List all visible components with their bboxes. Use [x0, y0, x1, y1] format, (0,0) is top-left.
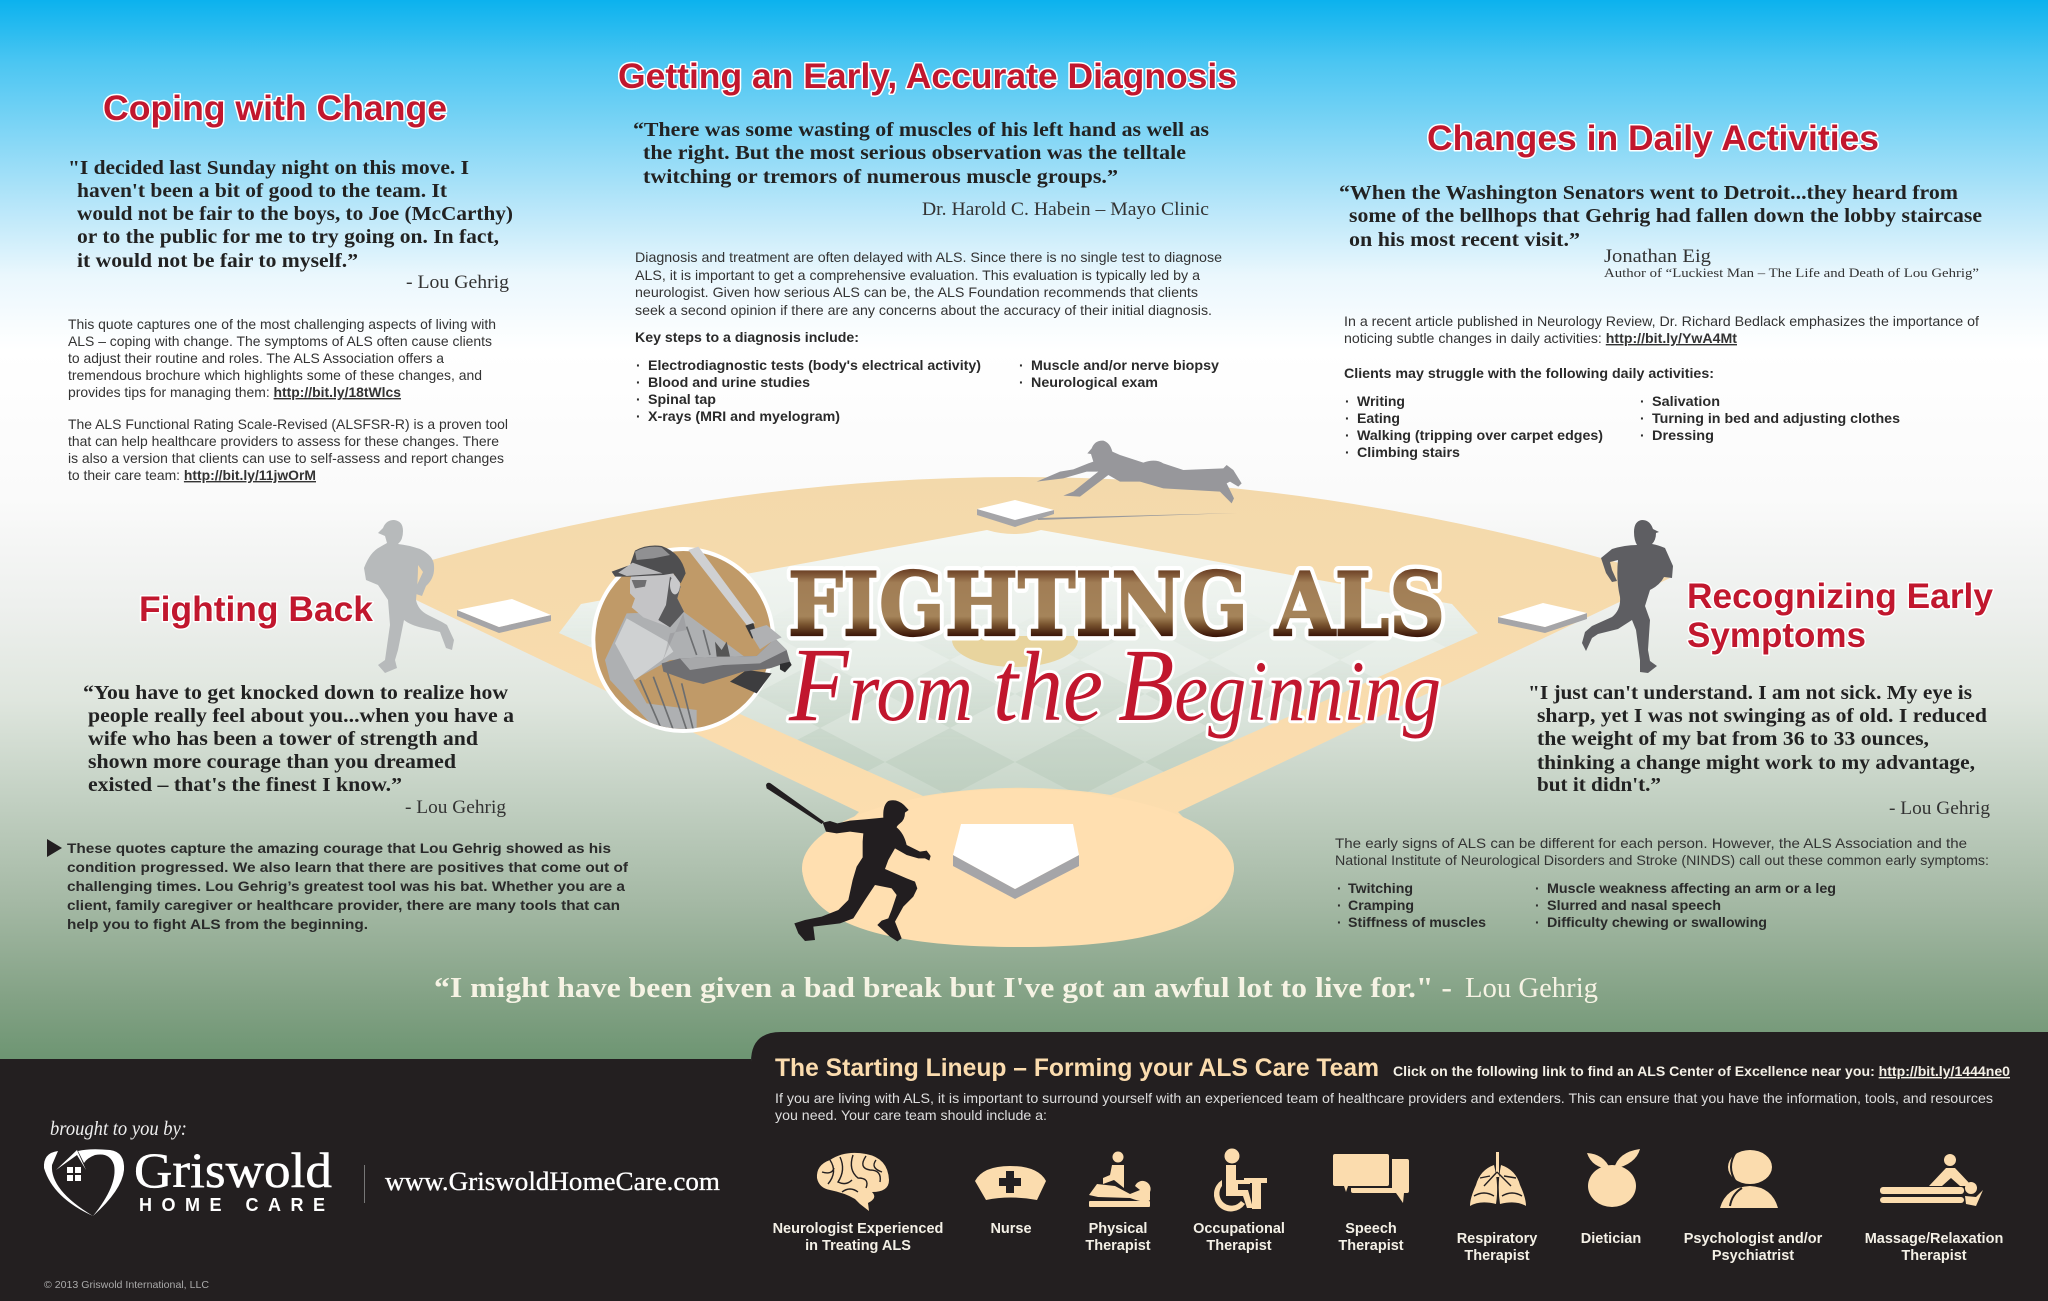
daily activities list: Dressing	[1652, 427, 1714, 443]
tagline: HOME CARE	[139, 1195, 325, 1215]
key steps list: ·	[636, 391, 641, 407]
symptoms list: ·	[1535, 880, 1540, 896]
quote: it would not be fair to myself.”	[77, 250, 358, 272]
team: neurologist	[773, 1153, 943, 1254]
quote	[1528, 682, 1990, 819]
icon: physical therapist	[1089, 1152, 1151, 1207]
slide shadow line	[1038, 513, 1237, 520]
heading: Getting an Early, Accurate Diagnosis	[618, 57, 1237, 96]
baseball field	[370, 477, 1670, 947]
icon: massage	[1880, 1154, 1983, 1206]
Griswold Home Care logo	[44, 1142, 332, 1216]
icon: wheelchair at desk	[1214, 1148, 1267, 1211]
batter silhouette	[766, 783, 931, 941]
symptoms list: Difficulty chewing or swallowing	[1547, 914, 1767, 930]
label: Therapist	[1901, 1248, 1967, 1264]
body text: The ALS Functional Rating Scale-Revised (ALSFSR-R) is a proven tool	[68, 416, 508, 432]
heading: Changes in Daily Activities	[1427, 119, 1879, 158]
closing quote: “I might have been given a bad break but I've got an awful lot to live for." -	[434, 972, 1452, 1004]
quote: on his most recent visit.”	[1349, 229, 1580, 251]
label: Therapist	[1464, 1248, 1530, 1264]
quote: would not be fair to the boys, to Joe (McCarthy)	[77, 203, 513, 225]
label	[1457, 1231, 1537, 1264]
quote: but it didn't.”	[1537, 774, 1661, 796]
icon: speech bubbles	[1333, 1154, 1409, 1203]
icon: brain	[817, 1153, 889, 1211]
body text: tremendous brochure which highlights some of these changes, and	[68, 367, 482, 383]
body text	[635, 249, 1222, 318]
symptoms list	[1337, 880, 1836, 930]
body text: Diagnosis and treatment are often delayed with ALS. Since there is no single test to diagnose	[635, 249, 1222, 265]
quote: “When the Washington Senators went to Detroit...they heard from	[1339, 182, 1958, 204]
body text: condition progressed. We also learn that there are positives that come out of	[67, 859, 628, 875]
body text: seek a second opinion if there are any concerns about the accuracy of their initial diagnosis.	[635, 302, 1212, 318]
daily activities list: Clients may struggle with the following daily activities:	[1344, 365, 1714, 381]
key steps list	[635, 329, 1219, 424]
panel: changes in daily activities	[1339, 119, 1982, 460]
daily activities list: Eating	[1357, 410, 1400, 426]
daily activities list: ·	[1345, 427, 1350, 443]
quote: Jonathan Eig	[1604, 246, 1712, 267]
quote: wife who has been a tower of strength and	[88, 728, 479, 750]
symptoms list: Cramping	[1348, 897, 1414, 913]
key steps list: Spinal tap	[648, 391, 716, 407]
daily activities list: ·	[1640, 393, 1645, 409]
symptoms list: ·	[1535, 897, 1540, 913]
symptoms list: Twitching	[1348, 880, 1413, 896]
label	[1865, 1231, 2003, 1264]
label: Dietician	[1581, 1231, 1641, 1247]
symptoms list: ·	[1337, 880, 1342, 896]
footer band	[0, 1032, 2048, 1301]
body text: provides tips for managing them: http://bit.ly/18tWlcs	[68, 384, 401, 400]
daily activities list: ·	[1345, 393, 1350, 409]
team: massage therapist	[1865, 1154, 2003, 1264]
closing quote: Lou Gehrig	[1465, 973, 1598, 1004]
label: Nurse	[990, 1221, 1032, 1237]
quote: shown more courage than you dreamed	[88, 751, 457, 773]
quote: people really feel about you...when you have a	[88, 705, 514, 727]
key steps list: ·	[636, 357, 641, 373]
key steps list: Electrodiagnostic tests (body's electrical activity)	[648, 357, 981, 373]
body text: to adjust their routine and roles. The ALS Association offers a	[68, 350, 444, 366]
second base	[977, 500, 1054, 527]
label: Speech	[1345, 1221, 1397, 1237]
quote	[68, 157, 513, 293]
left base	[457, 599, 551, 633]
label: Massage/Relaxation	[1865, 1231, 2003, 1247]
body text	[67, 840, 628, 932]
body text: is also a version that clients can use to self-assess and report changes	[68, 450, 504, 466]
daily activities list: Walking (tripping over carpet edges)	[1357, 427, 1603, 443]
daily activities list: Writing	[1357, 393, 1405, 409]
quote: - Lou Gehrig	[1889, 798, 1990, 819]
quote	[1339, 182, 1982, 280]
icon: lungs	[1470, 1152, 1526, 1206]
body text: help you to fight ALS from the beginning.	[67, 916, 368, 932]
key steps list: ·	[1019, 357, 1024, 373]
key steps list: ·	[636, 408, 641, 424]
panel: early accurate diagnosis	[618, 57, 1237, 424]
sliding runner silhouette	[1037, 441, 1242, 503]
label	[1085, 1221, 1151, 1254]
body text	[68, 316, 508, 483]
website url: www.GriswoldHomeCare.com	[385, 1167, 720, 1196]
quote: existed – that's the finest I know.”	[88, 774, 402, 796]
team: occupational therapist	[1193, 1148, 1285, 1254]
right runner silhouette	[1582, 520, 1673, 673]
copyright: © 2013 Griswold International, LLC	[44, 1279, 209, 1291]
quote: or to the public for me to try going on. In fact,	[77, 226, 499, 248]
home plate	[953, 824, 1079, 899]
label	[773, 1221, 943, 1254]
icon: nurse cap	[975, 1166, 1046, 1200]
icon: person with shadow	[1720, 1150, 1778, 1208]
team: psychologist	[1684, 1150, 1823, 1264]
label: Physical	[1089, 1221, 1147, 1237]
quote: - Lou Gehrig	[405, 797, 506, 818]
label: Respiratory	[1457, 1231, 1537, 1247]
quote: thinking a change might work to my advantage,	[1537, 752, 1975, 774]
key steps list: X-rays (MRI and myelogram)	[648, 408, 840, 424]
label	[1684, 1231, 1823, 1264]
daily activities list: ·	[1345, 444, 1350, 460]
label: Therapist	[1085, 1238, 1151, 1254]
intro text: you need. Your care team should include a:	[775, 1107, 1047, 1123]
icon: apple	[1587, 1149, 1640, 1207]
body text: neurologist. Given how serious ALS can be, the ALS Foundation recommends that clients	[635, 284, 1198, 300]
label: Neurologist Experienced	[773, 1221, 943, 1237]
quote: the weight of my bat from 36 to 33 ounces,	[1537, 728, 1929, 750]
label: Psychologist and/or	[1684, 1231, 1823, 1247]
daily activities list: ·	[1345, 410, 1350, 426]
link line: Click on the following link to find an ALS Center of Excellence near you: http://bit.ly/1444ne0	[1393, 1063, 2010, 1079]
subtitle: From the Beginning: Beginning	[1118, 628, 1441, 743]
team: physical therapist	[1085, 1152, 1151, 1254]
title: Fighting ALS: FIGHTING ALS	[788, 553, 1445, 656]
quote: haven't been a bit of good to the team. It	[77, 180, 447, 202]
label	[1338, 1221, 1404, 1254]
quote: - Lou Gehrig	[406, 272, 510, 293]
key steps list: Muscle and/or nerve biopsy	[1031, 357, 1219, 373]
portrait of Lou Gehrig	[591, 546, 792, 733]
label	[1193, 1221, 1285, 1254]
body text: that can help healthcare providers to assess for these changes. There	[68, 433, 499, 449]
daily activities list: ·	[1640, 427, 1645, 443]
quote: Author of “Luckiest Man – The Life and Death of Lou Gehrig”	[1604, 266, 1979, 280]
body text: challenging times. Lou Gehrig’s greatest tool was his bat. Whether you are a	[67, 878, 625, 894]
quote	[633, 119, 1209, 220]
icon: heart and house	[44, 1149, 124, 1216]
left runner silhouette	[364, 520, 454, 673]
title: Fighting ALS: FIGHTING ALS	[788, 553, 1445, 656]
heading: Coping with Change	[103, 89, 447, 128]
intro text	[775, 1090, 1993, 1123]
subtitle: From the Beginning: From	[788, 626, 973, 743]
panel: fighting back	[47, 590, 628, 932]
panel: recognizing early symptoms	[1335, 577, 1994, 930]
key steps list: ·	[1019, 374, 1024, 390]
quote: the right. But the most serious observation was the telltale	[643, 142, 1186, 164]
label: Therapist	[1206, 1238, 1272, 1254]
key steps list: Neurological exam	[1031, 374, 1158, 390]
brought to you by: brought to you by:	[50, 1118, 187, 1140]
daily activities list	[1344, 365, 1900, 460]
heading: The Starting Lineup – Forming your ALS Care Team	[775, 1054, 1379, 1082]
quote: "I decided last Sunday night on this move. I	[68, 157, 469, 179]
symptoms list: Muscle weakness affecting an arm or a leg	[1547, 880, 1836, 896]
label: Psychiatrist	[1712, 1248, 1794, 1264]
body text: client, family caregiver or healthcare provider, there are many tools that can	[67, 897, 620, 913]
body text: The early signs of ALS can be different for each person. However, the ALS Association and the	[1335, 835, 1967, 851]
body text	[1344, 313, 1979, 346]
symptoms list: Stiffness of muscles	[1348, 914, 1486, 930]
key steps list: Key steps to a diagnosis include:	[635, 329, 859, 345]
quote	[83, 682, 514, 818]
arrow marker	[47, 839, 62, 857]
body text: to their care team: http://bit.ly/11jwOrM	[68, 467, 316, 483]
body text: In a recent article published in Neurology Review, Dr. Richard Bedlack emphasizes the importance of	[1344, 313, 1979, 329]
quote: “There was some wasting of muscles of his left hand as well as	[633, 119, 1209, 141]
daily activities list: ·	[1640, 410, 1645, 426]
label: in Treating ALS	[805, 1238, 911, 1254]
subtitle: From the Beginning	[788, 626, 1441, 743]
quote: some of the bellhops that Gehrig had fallen down the lobby staircase	[1349, 205, 1982, 227]
quote: twitching or tremors of numerous muscle groups.”	[643, 166, 1118, 188]
body text: These quotes capture the amazing courage that Lou Gehrig showed as his	[67, 840, 611, 856]
panel: coping with change	[68, 89, 513, 483]
team: nurse	[975, 1166, 1046, 1237]
panel: starting lineup	[773, 1054, 2010, 1264]
right base	[1498, 603, 1587, 633]
daily activities list: Turning in bed and adjusting clothes	[1652, 410, 1900, 426]
team: respiratory therapist	[1457, 1152, 1537, 1264]
symptoms list: ·	[1337, 897, 1342, 913]
team: dietician	[1581, 1149, 1641, 1247]
intro text: If you are living with ALS, it is important to surround yourself with an experienced team of healthcare providers and extenders. This can ensure that you have the information, tools, and resources	[775, 1090, 1993, 1106]
heading	[1687, 577, 1994, 655]
label: Occupational	[1193, 1221, 1285, 1237]
key steps list: Blood and urine studies	[648, 374, 810, 390]
symptoms list: Slurred and nasal speech	[1547, 897, 1721, 913]
team: speech therapist	[1333, 1154, 1409, 1254]
label: Therapist	[1338, 1238, 1404, 1254]
quote: “You have to get knocked down to realize how	[83, 682, 508, 704]
body text: This quote captures one of the most challenging aspects of living with	[68, 316, 496, 332]
body text	[1335, 835, 1989, 868]
body text: ALS – coping with change. The symptoms of ALS often cause clients	[68, 333, 492, 349]
subtitle: From the Beginning: the	[993, 631, 1103, 742]
wordmark: Griswold	[134, 1142, 332, 1198]
symptoms list: ·	[1337, 914, 1342, 930]
daily activities list: Salivation	[1652, 393, 1720, 409]
body text: National Institute of Neurological Disorders and Stroke (NINDS) call out these common early symptoms:	[1335, 852, 1989, 868]
quote: sharp, yet I was not swinging as of old. I reduced	[1537, 705, 1988, 727]
heading: Recognizing Early	[1687, 577, 1994, 616]
body text: noticing subtle changes in daily activities: http://bit.ly/YwA4Mt	[1344, 330, 1737, 346]
heading: Fighting Back	[139, 590, 374, 629]
quote: "I just can't understand. I am not sick. My eye is	[1528, 682, 1972, 704]
quote: Dr. Harold C. Habein – Mayo Clinic	[922, 199, 1209, 220]
heading: Symptoms	[1687, 616, 1866, 655]
key steps list: ·	[636, 374, 641, 390]
symptoms list: ·	[1535, 914, 1540, 930]
body text: ALS, it is important to get a comprehensive evaluation. This evaluation is typically led by a	[635, 267, 1200, 283]
daily activities list: Climbing stairs	[1357, 444, 1460, 460]
